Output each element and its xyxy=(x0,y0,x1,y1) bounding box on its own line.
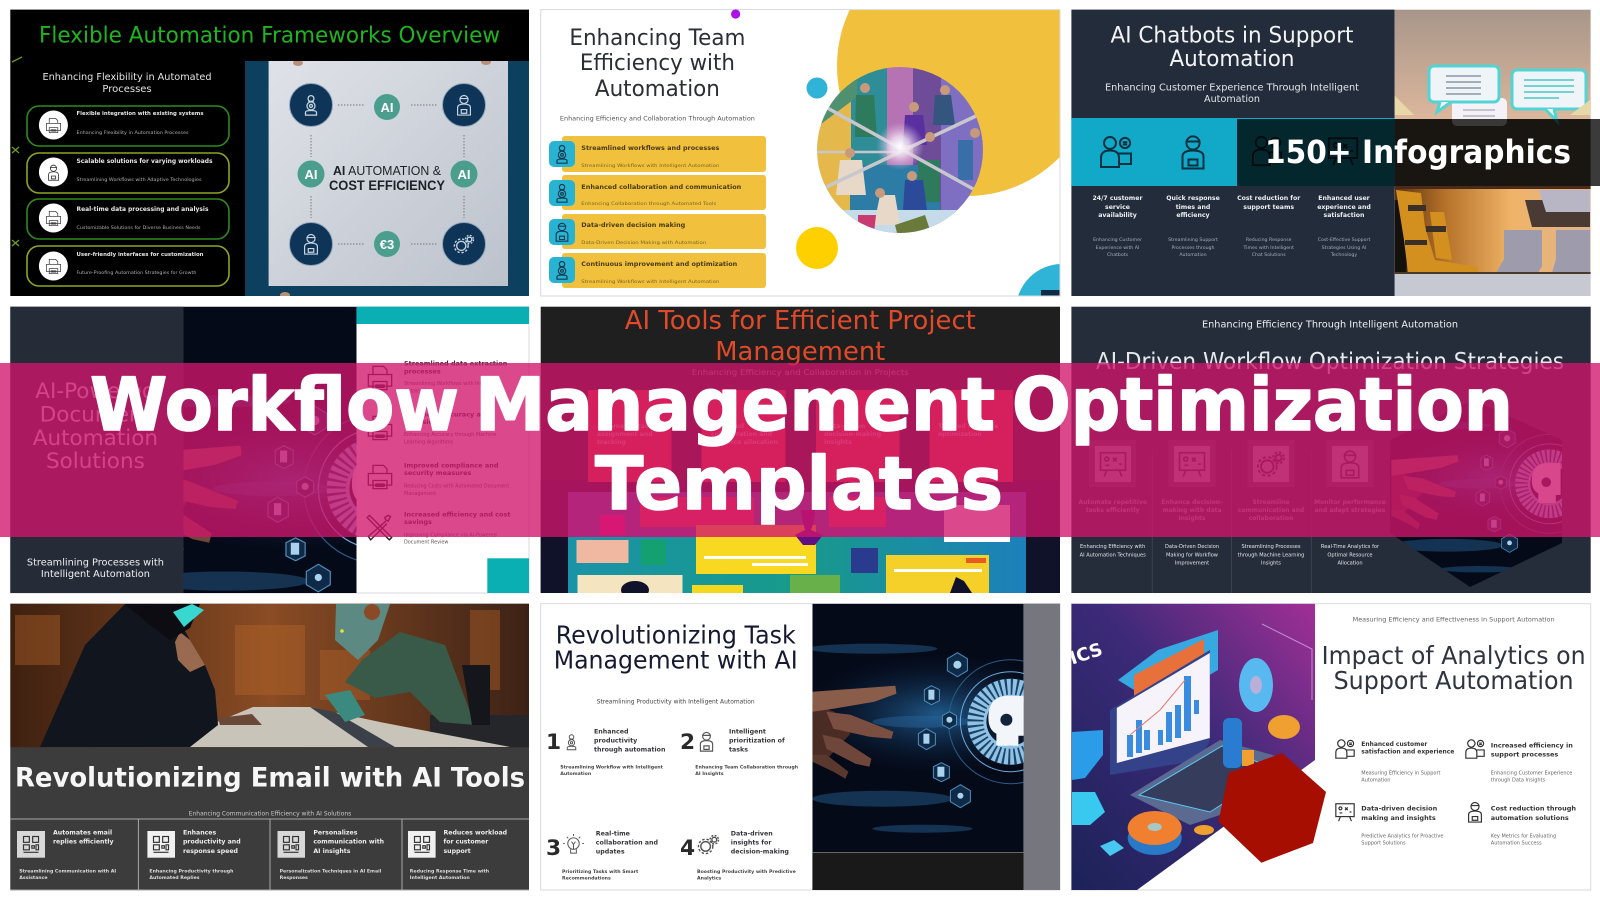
panel 2 title: Automation xyxy=(595,76,720,102)
column descriptions: Chatbots xyxy=(1107,252,1129,258)
column descriptions: Times with Intelligent xyxy=(1242,245,1294,251)
panel 5 title: Management xyxy=(715,337,885,367)
image: AI automation board: €3 xyxy=(380,237,394,252)
item 2: prioritization of xyxy=(729,738,785,744)
panel 4 subtitle xyxy=(27,558,164,580)
item: user-friendly interfaces: Future-Proofing Automation Strategies for Growth xyxy=(76,270,197,275)
column labels: availability xyxy=(1098,212,1137,219)
item: streamlined workflows: Streamlined workflows and processes xyxy=(581,145,720,152)
panel 9 subtitle: Measuring Efficiency and Effectiveness in Support Automation xyxy=(1353,616,1555,624)
panel 5 title xyxy=(625,306,976,367)
column descriptions: Experience with AI xyxy=(1096,245,1139,251)
item: cost reduction: Automation Success xyxy=(1491,841,1542,847)
feature cards: Tailored resource xyxy=(938,423,998,430)
item 4: 4 xyxy=(680,836,695,861)
panel 4 subtitle: Intelligent Automation xyxy=(41,569,150,580)
card: automates email: Automates email xyxy=(53,830,112,837)
item: enhanced accuracy: precision xyxy=(404,418,438,426)
card: personalizes communication xyxy=(278,830,384,881)
item 1: 1 xyxy=(546,730,561,755)
decorative dots xyxy=(731,9,838,269)
card: reduces workload: Reducing Response Time with xyxy=(410,868,489,874)
item: enhanced accuracy: Learning Algorithms xyxy=(404,440,454,446)
item 1 xyxy=(546,728,665,777)
panel 2 title: Efficiency with xyxy=(580,50,735,76)
card: personalizes communication: Responses xyxy=(280,875,308,881)
panel 4 subtitle: Streamlining Processes with xyxy=(27,558,164,569)
strategy labels: Automate repetitive xyxy=(1078,499,1147,506)
item: streamlined workflows: Streamlining Workflows with Intelligent Automation xyxy=(581,163,719,169)
column labels xyxy=(1092,195,1371,219)
strategy labels xyxy=(1078,499,1386,522)
strategy descriptions: Data-Driven Decision xyxy=(1165,544,1219,550)
strategy descriptions: Streamlining Processes xyxy=(1241,544,1301,550)
strategy labels: tasks efficiently xyxy=(1086,507,1140,514)
image: isometric analytics laptop: ICS xyxy=(1067,639,1105,669)
card: automates email: replies efficiently xyxy=(53,839,114,846)
image: AI automation board: AI xyxy=(458,167,470,182)
item: data-driven decisions xyxy=(549,214,766,249)
panel 7 title: Revolutionizing Email with AI Tools xyxy=(15,763,525,794)
item: streamlined workflows xyxy=(549,136,766,172)
panel: enhancing team efficiency xyxy=(540,9,1060,296)
item 3: Recommendations xyxy=(562,876,611,882)
panel 5 subtitle: Enhancing Efficiency and Collaboration in Projects xyxy=(692,368,909,377)
panel: AI tools for project management xyxy=(541,306,1060,599)
item: streamlined data extraction: Streamlining Workflows with Intelligent xyxy=(404,381,500,387)
item: cost reduction: Key Metrics for Evaluating xyxy=(1491,834,1556,840)
image: man and robot xyxy=(10,604,529,748)
panel: AI-driven workflow optimization xyxy=(1071,307,1600,593)
item: continuous improvement: Continuous improvement and optimization xyxy=(581,261,737,268)
image: hand and HUD xyxy=(184,306,356,593)
panel 2 title xyxy=(569,25,745,102)
column labels: service xyxy=(1105,204,1130,211)
strategy descriptions: Enhancing Efficiency with xyxy=(1080,544,1145,550)
card: automates email: Assistance xyxy=(19,875,48,881)
panel 8 title: Management with AI xyxy=(554,645,798,674)
column descriptions: Automation xyxy=(1179,252,1207,258)
panel: revolutionizing email xyxy=(10,604,529,890)
strategy labels: communication and xyxy=(1238,507,1304,514)
item 2: AI Insights xyxy=(695,771,724,777)
card: personalizes communication: Personalization Techniques in AI Email xyxy=(280,868,382,874)
item: scalable solutions: Streamlining Workflows with Adaptive Technologies xyxy=(76,177,202,182)
feature cards: decision-making xyxy=(824,431,881,438)
item 4: Data-driven xyxy=(731,830,773,837)
strategy labels: collaboration xyxy=(1249,515,1293,522)
item: enhanced collaboration: Enhanced collaboration and communication xyxy=(581,184,741,191)
panel 8 title: Revolutionizing Task xyxy=(556,620,796,649)
card: enhances productivity xyxy=(147,830,241,881)
card: enhances productivity: productivity and xyxy=(183,839,241,846)
column descriptions: Cost-Effective Support xyxy=(1318,237,1370,243)
column descriptions: Enhancing Customer xyxy=(1093,237,1142,243)
item: enhanced accuracy: Enhanced accuracy and xyxy=(404,411,491,419)
item 3 xyxy=(546,830,658,882)
icon band xyxy=(1071,118,1395,186)
item: increased efficiency: Document Review xyxy=(404,540,448,546)
item: increased efficiency: through Data Insights xyxy=(1491,778,1546,784)
item: flexible integration: Flexible integration with existing systems xyxy=(76,111,204,117)
feature cards: Automated task xyxy=(597,423,654,430)
item: data-driven decisions: Support Solutions xyxy=(1361,841,1406,847)
item: user-friendly interfaces xyxy=(27,246,229,286)
column labels: times and xyxy=(1176,204,1210,211)
panel 2 subtitle: Enhancing Efficiency and Collaboration Through Automation xyxy=(560,116,755,123)
panel 3 subtitle: Enhancing Customer Experience Through Intelligent xyxy=(1105,83,1359,94)
feature cards: collaboration and xyxy=(711,431,772,438)
item: increased efficiency: Increased efficiency in xyxy=(1491,741,1573,749)
banner title: Templates xyxy=(595,442,1003,527)
strategy descriptions: Improvement xyxy=(1175,561,1209,567)
column labels: Cost reduction for xyxy=(1237,195,1301,202)
item: cost reduction xyxy=(1469,802,1576,847)
column labels: Enhanced user xyxy=(1318,195,1371,202)
item: scalable solutions: Scalable solutions for varying workloads xyxy=(76,158,213,165)
panel 3 subtitle xyxy=(1105,83,1359,105)
banner title xyxy=(90,363,1513,527)
panel: flexible automation frameworks xyxy=(10,10,529,298)
item 3: collaboration and xyxy=(596,839,658,846)
card: personalizes communication: AI insights xyxy=(313,848,351,855)
item: continuous improvement xyxy=(549,253,766,288)
item 1: Automation xyxy=(560,771,591,777)
card: automates email: Streamlining Communication with AI xyxy=(19,868,116,874)
panel 4 title: Solutions xyxy=(46,449,145,474)
item 1: Streamlining Workflow with Intelligent xyxy=(560,764,664,770)
strategy labels: making with data xyxy=(1162,507,1222,514)
card: reduces workload: Intelligent Automation xyxy=(410,875,470,881)
strategy descriptions: Optimal Resource xyxy=(1327,553,1373,559)
feature cards: tracking xyxy=(597,439,626,446)
card: personalizes communication: communication with xyxy=(313,839,384,846)
strategy icons xyxy=(1089,440,1374,487)
dark strip: 150+ infographics: 150+ Infographics xyxy=(1265,133,1571,171)
item: increased efficiency: Improving Compliance via AI-Powered xyxy=(404,533,497,539)
panel 4 title xyxy=(33,379,158,474)
image: AI automation board: AI AUTOMATION & xyxy=(333,163,441,178)
column descriptions: Processes through xyxy=(1171,245,1215,251)
card: enhances productivity: response speed xyxy=(183,848,238,855)
item 1: through automation xyxy=(594,746,665,754)
panel 7 subtitle: Enhancing Communication Efficiency with AI Solutions xyxy=(189,811,351,818)
image: colourful project board xyxy=(568,492,1026,599)
image: AI automation board: AI xyxy=(380,100,394,115)
item: data-driven decisions: making and insights xyxy=(1361,814,1436,822)
banner: workflow management optimization templates xyxy=(0,363,1600,537)
image: hand and HUD large xyxy=(812,604,1024,852)
image: AI automation board: COST EFFICIENCY xyxy=(329,177,446,193)
item: streamlined data extraction: Streamlined data extraction xyxy=(404,360,508,368)
column descriptions: Reducing Response xyxy=(1246,237,1292,243)
item: improved compliance xyxy=(368,461,509,497)
panel: revolutionizing task management xyxy=(541,604,1077,890)
item: streamlined data extraction xyxy=(368,360,508,395)
item: continuous improvement: Streamlining Workflows with Intelligent Automation xyxy=(581,279,719,285)
column descriptions xyxy=(1093,237,1370,258)
strategy descriptions: Allocation xyxy=(1337,561,1363,567)
feature cards xyxy=(588,390,1013,482)
banner title: Optimization xyxy=(1012,363,1513,448)
panel 4 title: Document xyxy=(40,403,151,428)
red hexagon xyxy=(1218,753,1326,863)
panel 5 title: AI Tools for Efficient Project xyxy=(625,306,976,336)
item: scalable solutions xyxy=(27,153,229,193)
item: flexible integration: Enhancing Flexibility in Automation Processes xyxy=(76,130,188,135)
panel 8 subtitle: Streamlining Productivity with Intelligent Automation xyxy=(597,698,755,705)
feature cards: optimization xyxy=(938,431,982,438)
item: customer satisfaction: Automation xyxy=(1361,778,1390,784)
card: enhances productivity: Enhances xyxy=(183,830,216,837)
column labels: Quick response xyxy=(1166,195,1220,202)
strategy descriptions: Real-Time Analytics for xyxy=(1321,544,1380,550)
item 2: Intelligent xyxy=(729,728,766,735)
item 2: Enhancing Team Collaboration through xyxy=(695,764,798,770)
item: enhanced accuracy xyxy=(368,411,496,446)
item: data-driven decisions: Data-driven decision xyxy=(1361,805,1438,813)
item: user-friendly interfaces: User-friendly interfaces for customization xyxy=(76,252,204,258)
item: data-driven decisions xyxy=(1336,804,1443,847)
panel 8 title xyxy=(554,620,798,674)
item: cost reduction: Cost reduction through xyxy=(1491,805,1576,813)
column descriptions: Chat Solutions xyxy=(1252,252,1286,258)
card: reduces workload: for customer xyxy=(444,839,489,846)
panel 6 subtitle: Enhancing Efficiency Through Intelligent Automation xyxy=(1202,320,1458,331)
item: enhanced accuracy: Enhancing Accuracy through Machine xyxy=(404,432,496,438)
panel 9 title: Impact of Analytics on xyxy=(1322,641,1586,670)
strategy descriptions: Insights xyxy=(1261,561,1281,567)
panel 2 title: Enhancing Team xyxy=(569,25,745,51)
item: increased efficiency: savings xyxy=(404,518,432,526)
dark strip: 150+ infographics xyxy=(1237,119,1600,186)
panel 3 title xyxy=(1110,24,1354,72)
card: reduces workload xyxy=(408,830,507,881)
panel 3 title: AI Chatbots in Support xyxy=(1110,24,1354,49)
item 4 xyxy=(680,830,796,882)
item: streamlined data extraction: processes xyxy=(404,368,441,376)
item 4: insights for xyxy=(731,839,772,846)
panel 3 subtitle: Automation xyxy=(1204,94,1260,105)
feature cards: Improved xyxy=(711,423,744,430)
strategy labels: Enhance decision- xyxy=(1161,499,1223,506)
column separators xyxy=(1152,450,1311,593)
column labels: 24/7 customer xyxy=(1092,195,1143,202)
decorative green marks xyxy=(12,57,22,246)
item: real-time data: Real-time data processing and analysis xyxy=(76,206,209,213)
column labels: satisfaction xyxy=(1324,212,1364,219)
feature cards: Data-driven xyxy=(824,423,865,430)
item: data-driven decisions: Predictive Analytics for Proactive xyxy=(1361,834,1443,840)
item: increased efficiency xyxy=(1466,740,1573,784)
panel 1 title: Flexible Automation Frameworks Overview xyxy=(39,24,500,49)
image: AI automation board xyxy=(245,59,529,298)
panel 9 title: Support Automation xyxy=(1334,666,1574,695)
strategy labels: Monitor performance xyxy=(1314,499,1386,506)
column labels: experience and xyxy=(1317,204,1371,211)
card: enhances productivity: Enhancing Productivity through xyxy=(149,868,234,874)
item: cost reduction: automation solutions xyxy=(1491,814,1569,822)
panel: impact of analytics xyxy=(1067,604,1591,890)
column descriptions: Technology xyxy=(1330,252,1357,258)
strategy descriptions: AI Automation Techniques xyxy=(1080,553,1146,559)
item: enhanced collaboration: Enhancing Collaboration through Automated Tools xyxy=(581,201,717,207)
item: data-driven decisions: Data-driven decision making xyxy=(581,222,685,229)
item: increased efficiency: support processes xyxy=(1491,751,1558,759)
feature cards: insights xyxy=(824,439,852,446)
feature cards: assignment and xyxy=(597,431,653,438)
panel 9 title xyxy=(1322,641,1586,695)
image: chat bubbles and robots xyxy=(1394,10,1591,296)
card: automates email xyxy=(17,830,116,881)
column descriptions: Strategies Using AI xyxy=(1322,245,1366,251)
panel 3 title: Automation xyxy=(1170,47,1294,72)
item: streamlined data extraction: Automation xyxy=(404,389,432,395)
panel: AI-powered document automation xyxy=(10,307,529,622)
banner title: Management xyxy=(475,363,995,448)
item 4: Analytics xyxy=(697,876,721,882)
item 4: decision-making xyxy=(731,849,789,856)
column labels: support teams xyxy=(1243,204,1294,211)
item 1: Enhanced xyxy=(594,728,629,735)
item 2: 2 xyxy=(680,730,695,755)
strategy labels: insights xyxy=(1179,515,1206,522)
item 3: 3 xyxy=(546,836,561,861)
item 4: Boosting Productivity with Predictive xyxy=(697,869,796,875)
item: improved compliance: security measures xyxy=(404,469,471,477)
item: improved compliance: Reducing Costs with Automated Document xyxy=(404,483,509,489)
strategy descriptions: Making for Workflow xyxy=(1166,553,1218,559)
item 2: tasks xyxy=(729,746,748,754)
card: reduces workload: support xyxy=(444,848,471,855)
item: real-time data xyxy=(27,199,229,239)
panel 6 title: AI-Driven Workflow Optimization Strategies xyxy=(1096,349,1564,375)
panel 1 subtitle: Enhancing Flexibility in Automated xyxy=(42,72,212,83)
item: increased efficiency: Increased efficiency and cost xyxy=(404,510,510,518)
item 3: Prioritizing Tasks with Smart xyxy=(562,869,639,875)
item 3: Real-time xyxy=(596,830,630,837)
feature cards: resource allocation xyxy=(711,439,778,446)
card: personalizes communication: Personalizes xyxy=(313,830,358,837)
item: real-time data: Customizable Solutions for Diverse Business Needs xyxy=(76,225,200,230)
item 2 xyxy=(680,728,798,777)
item: customer satisfaction xyxy=(1336,740,1455,784)
item: enhanced collaboration xyxy=(549,175,766,210)
panel 4 title: Automation xyxy=(33,426,158,451)
panel 4 title: AI-Powered xyxy=(35,379,156,404)
item: improved compliance: Management xyxy=(404,491,436,497)
column descriptions: Streamlining Support xyxy=(1168,237,1218,243)
item: increased efficiency xyxy=(367,510,510,546)
image: AI automation board: AI xyxy=(304,167,318,182)
item: increased efficiency: Enhancing Customer Experience xyxy=(1491,771,1572,777)
banner title: Workflow xyxy=(90,363,459,448)
item: data-driven decisions: Data-Driven Decision Making with Automation xyxy=(581,240,706,246)
item: flexible integration xyxy=(27,106,229,146)
item: customer satisfaction: satisfaction and experience xyxy=(1361,748,1455,756)
panel 1 subtitle xyxy=(42,72,212,95)
item: customer satisfaction: Enhanced customer xyxy=(1361,740,1428,748)
card grid lines xyxy=(10,819,529,890)
column labels: efficiency xyxy=(1176,212,1210,219)
item: customer satisfaction: Measuring Efficiency in Support xyxy=(1361,771,1441,777)
card: reduces workload: Reduces workload xyxy=(444,830,507,837)
panel: AI chatbots in support xyxy=(1071,10,1591,296)
strategy descriptions: through Machine Learning xyxy=(1238,553,1304,559)
image: team circle illustration xyxy=(817,67,984,240)
card: enhances productivity: Automated Replies xyxy=(149,875,200,881)
strategy descriptions xyxy=(1080,544,1380,567)
image: hexagon hand and HUD xyxy=(1392,429,1562,587)
item 1: productivity xyxy=(594,738,637,744)
strategy labels: Streamline xyxy=(1253,499,1289,506)
strategy labels: and adapt strategies xyxy=(1315,507,1386,514)
image: isometric analytics laptop xyxy=(1067,604,1315,890)
panel 1 subtitle: Processes xyxy=(102,84,152,95)
item 3: updates xyxy=(596,849,625,856)
item: improved compliance: Improved compliance and xyxy=(404,461,499,469)
